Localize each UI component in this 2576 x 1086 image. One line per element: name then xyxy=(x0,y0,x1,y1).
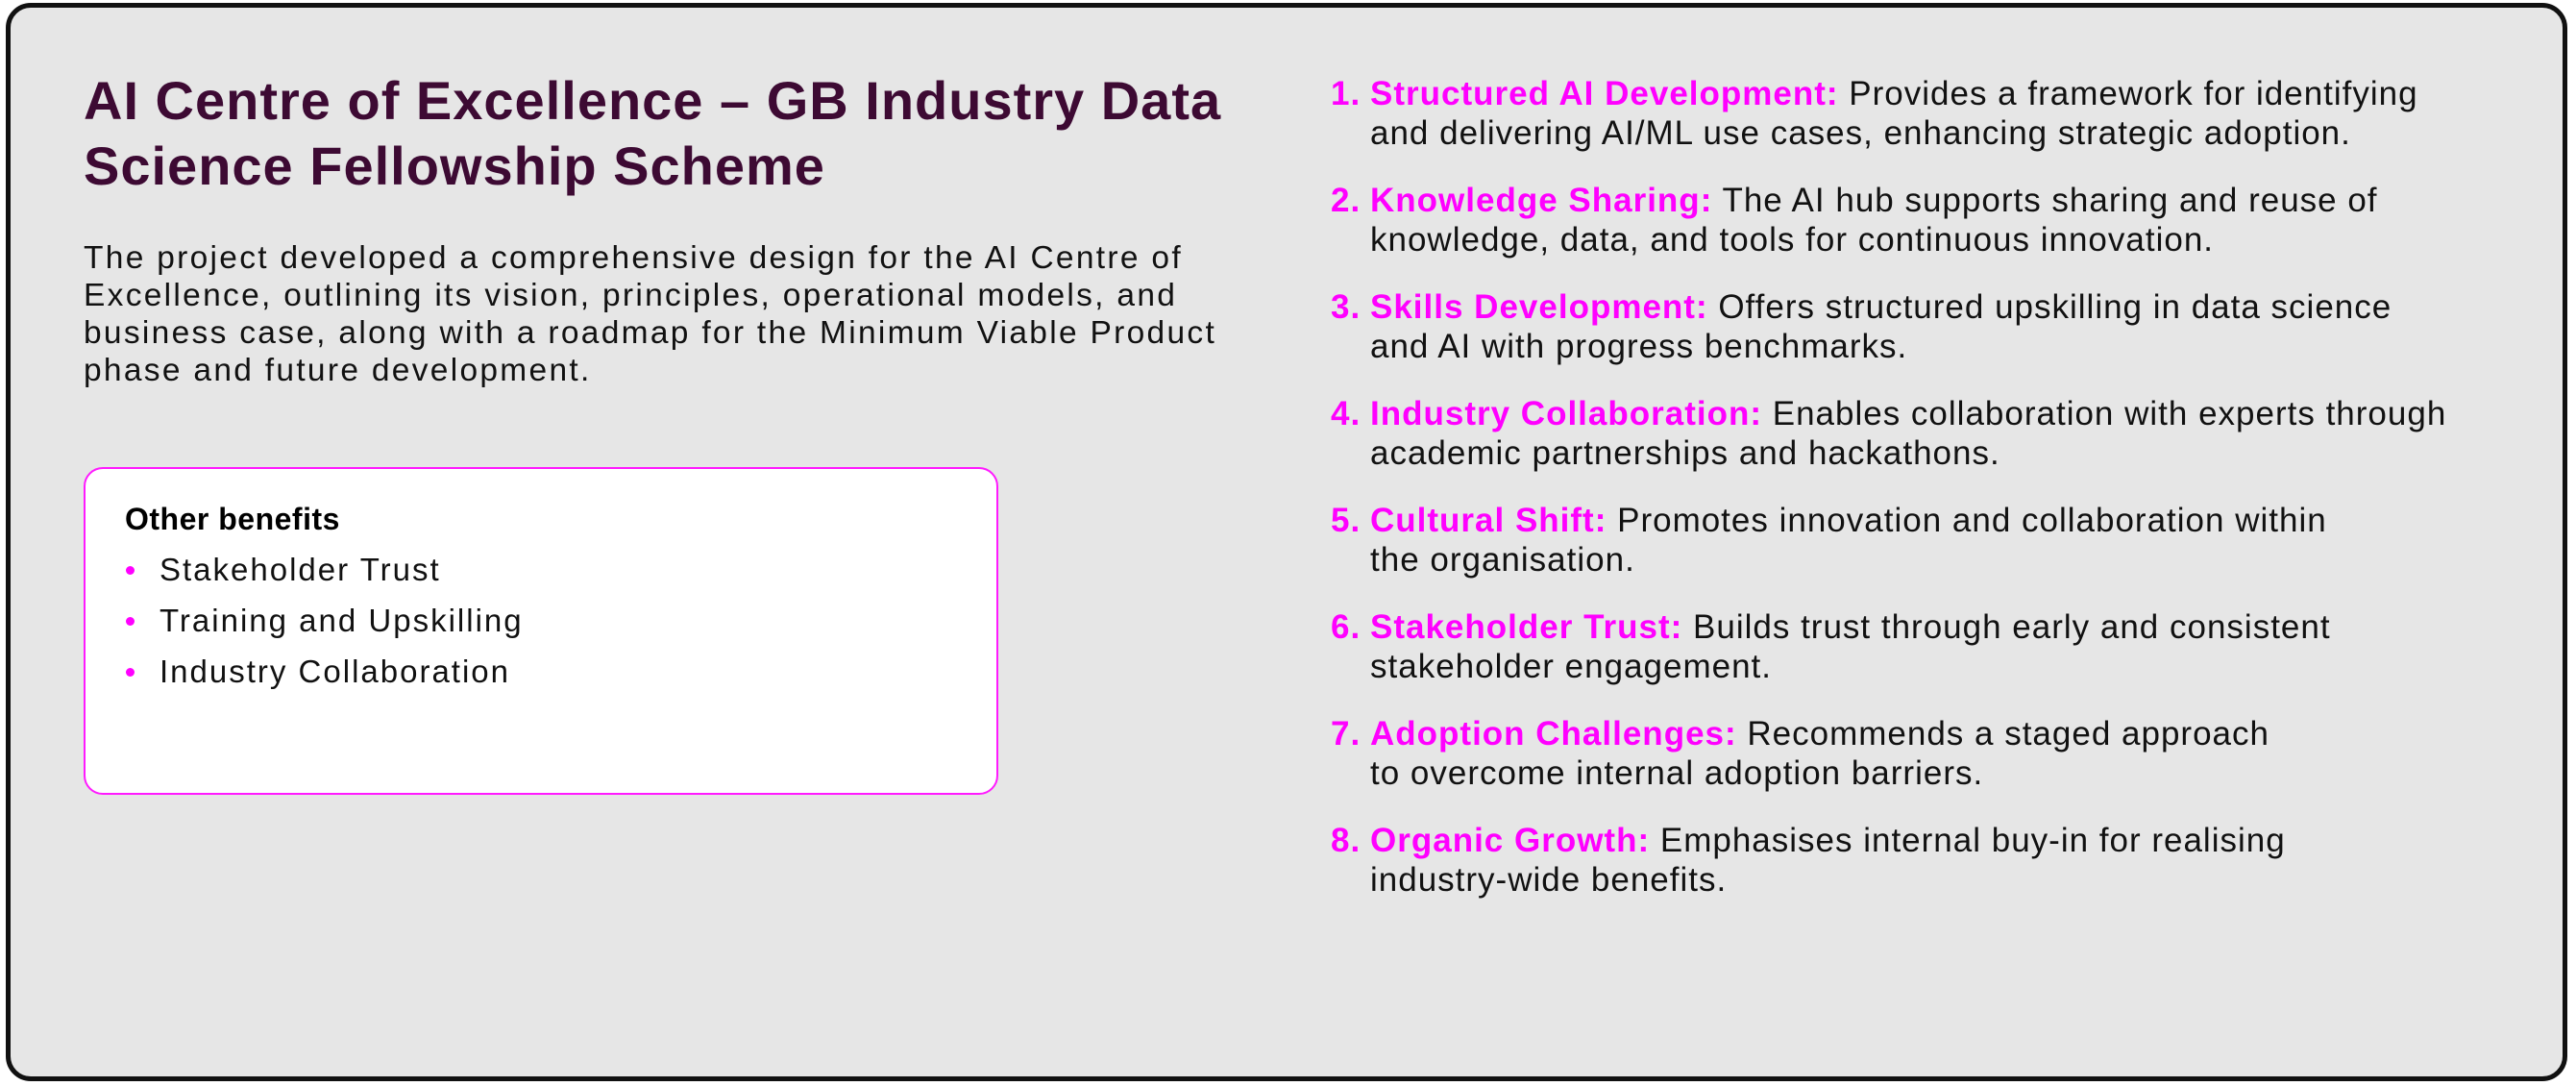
text: industry-wide benefits. xyxy=(1370,861,1727,899)
title: Science Fellowship Scheme xyxy=(84,136,825,196)
text block: project description xyxy=(84,240,1216,388)
text block: project description: Excellence, outlining its vision, principles, operational models, and xyxy=(84,278,1177,313)
text: 7. xyxy=(1331,715,1361,753)
title: AI Centre of Excellence – GB Industry Data xyxy=(84,70,1221,131)
text: and AI with progress benchmarks. xyxy=(1370,328,1907,365)
item 4 xyxy=(1331,395,2446,472)
text: stakeholder engagement. xyxy=(1370,648,1772,685)
text: 1. xyxy=(1331,75,1361,112)
text: 2. xyxy=(1331,182,1361,219)
bullet: training: Training and Upskilling xyxy=(159,603,524,638)
text: Organic Growth: Emphasises internal buy-in for realising xyxy=(1370,822,2286,859)
item 6 xyxy=(1331,608,2331,685)
text: Knowledge Sharing: The AI hub supports sharing and reuse of xyxy=(1370,182,2378,219)
text block: project description: The project developed a comprehensive design for the AI Centre of xyxy=(84,240,1183,276)
item 7 xyxy=(1331,715,2269,792)
text: the organisation. xyxy=(1370,541,1635,579)
bullet: industry collaboration: Industry Collaboration xyxy=(159,654,510,689)
item 8 xyxy=(1331,822,2286,899)
bullet: stakeholder trust: Stakeholder Trust xyxy=(159,552,441,587)
item 2 xyxy=(1331,182,2378,259)
text: 3. xyxy=(1331,288,1361,326)
text: Industry Collaboration: Enables collaboration with experts through xyxy=(1370,395,2446,432)
text: Cultural Shift: Promotes innovation and collaboration within xyxy=(1370,502,2327,539)
text: 5. xyxy=(1331,502,1361,539)
text: to overcome internal adoption barriers. xyxy=(1370,754,1983,792)
text: 8. xyxy=(1331,822,1361,859)
text block: project description: phase and future development. xyxy=(84,353,592,388)
text block: project description: business case, along with a roadmap for the Minimum Viable Product xyxy=(84,315,1216,351)
panel: other benefits xyxy=(84,467,998,795)
item 3 xyxy=(1331,288,2392,365)
text: Skills Development: Offers structured upskilling in data science xyxy=(1370,288,2392,326)
item 5 xyxy=(1331,502,2327,579)
numbered list: benefits xyxy=(1331,75,2446,899)
text: Adoption Challenges: Recommends a staged approach xyxy=(1370,715,2269,753)
text: academic partnerships and hackathons. xyxy=(1370,434,2000,472)
text: Structured AI Development: Provides a framework for identifying xyxy=(1370,75,2418,112)
title xyxy=(84,70,1221,196)
text: 4. xyxy=(1331,395,1361,432)
item 1 xyxy=(1331,75,2418,152)
heading: other benefits: Other benefits xyxy=(125,502,340,536)
text: knowledge, data, and tools for continuous innovation. xyxy=(1370,221,2214,259)
text: and delivering AI/ML use cases, enhancing strategic adoption. xyxy=(1370,114,2351,152)
text: Stakeholder Trust: Builds trust through early and consistent xyxy=(1370,608,2331,646)
text: 6. xyxy=(1331,608,1361,646)
